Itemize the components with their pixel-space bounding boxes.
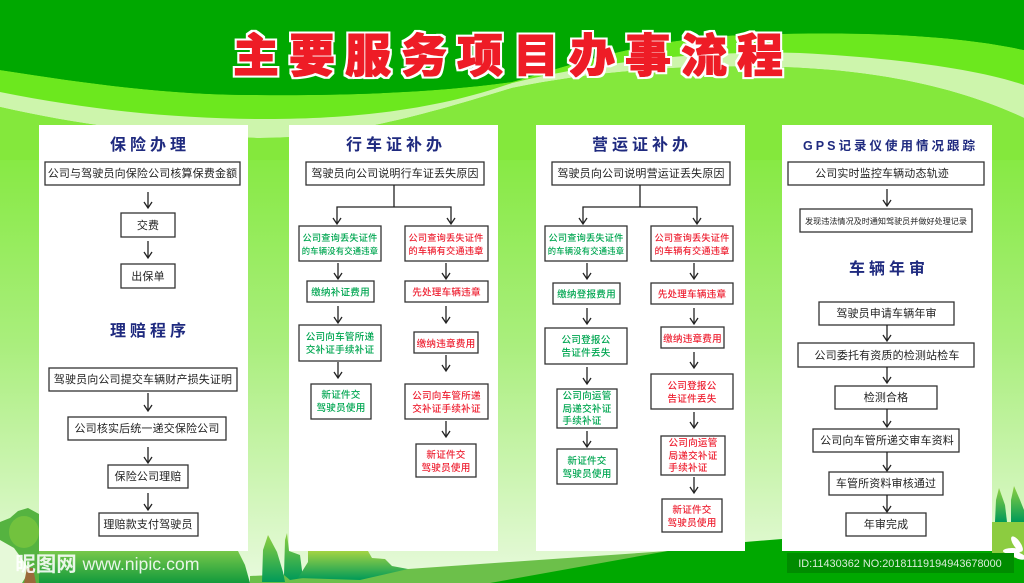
panel: insurance bbox=[39, 125, 248, 551]
watermark logo: www.nipic.com bbox=[82, 554, 199, 574]
red box 5 bbox=[661, 436, 725, 475]
green box 1: 的车辆没有交通违章 bbox=[302, 246, 378, 256]
red box 4: 公司登报公 bbox=[668, 380, 717, 392]
arrow bbox=[144, 241, 152, 258]
arrow bbox=[334, 306, 342, 323]
green box 3: 公司向车管所递 bbox=[306, 331, 374, 343]
box: 递交资料: 公司向车管所递交审车资料 bbox=[820, 433, 954, 447]
arrow bbox=[442, 263, 450, 279]
watermark logo bbox=[15, 553, 199, 576]
box: 理赔款支付: 理赔款支付驾驶员 bbox=[103, 517, 193, 531]
green box 4: 驾驶员使用 bbox=[317, 402, 365, 414]
red box 4: 交补证手续补证 bbox=[412, 403, 481, 415]
box: 交费 bbox=[121, 213, 175, 237]
arrow bbox=[334, 263, 342, 279]
heading: 车辆年审: 车辆年审 bbox=[849, 259, 929, 278]
box: 委托检车 bbox=[798, 343, 974, 367]
title: 主要服务项目办事流程 bbox=[233, 30, 793, 82]
heading: 营运证补办: 营运证补办 bbox=[592, 136, 692, 154]
panel: GPS and annual inspection bbox=[782, 125, 992, 551]
green box 2 bbox=[307, 281, 374, 302]
red box 1: 的车辆有交通违章 bbox=[654, 245, 730, 256]
green box 4: 新证件交 bbox=[321, 389, 361, 401]
arrow bbox=[690, 477, 698, 493]
watermark bar bbox=[787, 553, 1014, 573]
box: 统一递交: 公司核实后统一递交保险公司 bbox=[75, 421, 219, 435]
green box 2 bbox=[553, 283, 620, 304]
arrow bbox=[690, 352, 698, 368]
box: 说明原因 bbox=[552, 162, 730, 185]
red box 2 bbox=[651, 283, 733, 304]
box: 保险公司理赔: 保险公司理赔 bbox=[115, 469, 181, 483]
heading: 保险办理: 保险办理 bbox=[110, 135, 190, 154]
arrow bbox=[442, 355, 450, 371]
arrow bbox=[144, 493, 152, 510]
red box 2: 先处理车辆违章 bbox=[658, 288, 726, 300]
red box 1 bbox=[405, 226, 488, 261]
box: 检测合格: 检测合格 bbox=[864, 390, 908, 404]
arrow bbox=[690, 263, 698, 279]
green box 3: 公司登报公 bbox=[562, 334, 611, 346]
arrow bbox=[442, 306, 450, 323]
red box 6 bbox=[662, 499, 722, 532]
right decoration bbox=[992, 486, 1024, 561]
red box 2 bbox=[405, 281, 488, 302]
arrow bbox=[690, 412, 698, 428]
panel: operating licence replacement bbox=[536, 125, 745, 551]
arrow bbox=[883, 189, 891, 206]
box: 出保单 bbox=[121, 264, 175, 288]
panel: driving licence replacement bbox=[289, 125, 498, 551]
box: 提交证明: 驾驶员向公司提交车辆财产损失证明 bbox=[54, 372, 232, 386]
box: 统一递交 bbox=[68, 417, 226, 440]
arrow bbox=[883, 325, 891, 341]
red box 3 bbox=[661, 327, 724, 348]
box: 监控轨迹: 公司实时监控车辆动态轨迹 bbox=[815, 166, 949, 180]
green box 1 bbox=[299, 226, 381, 261]
red box 4 bbox=[651, 374, 733, 409]
watermark bar: ID:11430362 NO:20181119194943678000 bbox=[798, 558, 1002, 570]
arrow bbox=[144, 393, 152, 411]
arrow bbox=[883, 367, 891, 383]
box: 检测合格 bbox=[835, 386, 937, 409]
arrow bbox=[883, 495, 891, 512]
red box 5: 局递交补证 bbox=[669, 450, 718, 462]
red box 3 bbox=[414, 332, 478, 353]
red box 1: 的车辆有交通违章 bbox=[408, 245, 484, 256]
red box 3: 缴纳违章费用 bbox=[663, 333, 722, 345]
box: 递交资料 bbox=[813, 429, 959, 452]
box: 理赔款支付 bbox=[99, 513, 198, 536]
arrow bbox=[144, 192, 152, 208]
arrow bbox=[883, 409, 891, 427]
green box 4: 手续补证 bbox=[562, 415, 602, 427]
box: 审核通过: 车管所资料审核通过 bbox=[836, 476, 936, 490]
red box 5: 公司向运管 bbox=[669, 437, 718, 449]
box: 核算保费金额 bbox=[45, 162, 240, 185]
bottom green ground bbox=[250, 539, 1024, 583]
trees and hedge bbox=[262, 533, 408, 582]
green box 3: 告证件丢失 bbox=[562, 347, 611, 359]
heading: 行车证补办: 行车证补办 bbox=[346, 135, 446, 154]
arrow bbox=[583, 308, 591, 324]
box: 委托检车: 公司委托有资质的检测站检车 bbox=[815, 348, 959, 362]
red box 6: 新证件交 bbox=[672, 504, 712, 516]
green box 3 bbox=[545, 328, 627, 364]
box: 提交证明 bbox=[49, 368, 237, 391]
box: 申请年审 bbox=[819, 302, 954, 325]
red box 3: 缴纳违章费用 bbox=[417, 338, 475, 350]
arrow bbox=[883, 452, 891, 471]
red box 6: 驾驶员使用 bbox=[668, 517, 716, 529]
green box 3 bbox=[299, 325, 381, 361]
box: 审核通过 bbox=[829, 472, 943, 495]
green box 2: 缴纳登报费用 bbox=[557, 288, 616, 300]
green box 1: 的车辆没有交通违章 bbox=[548, 246, 624, 256]
red box 5 bbox=[416, 444, 476, 477]
box: 监控轨迹 bbox=[788, 162, 984, 185]
red box 1 bbox=[651, 226, 733, 261]
green box 1 bbox=[545, 226, 627, 261]
box: 保险公司理赔 bbox=[108, 465, 188, 488]
red box 5: 新证件交 bbox=[426, 449, 466, 461]
green box 5 bbox=[557, 449, 617, 484]
box: 发现违法: 发现违法情况及时通知驾驶员并做好处理记录 bbox=[805, 216, 967, 226]
box: 说明原因: 驾驶员向公司说明行车证丢失原因 bbox=[311, 166, 479, 180]
red box 5: 驾驶员使用 bbox=[422, 462, 470, 474]
arrow bbox=[442, 421, 450, 437]
box: 年审完成: 年审完成 bbox=[864, 517, 908, 531]
green box 4: 局递交补证 bbox=[563, 403, 612, 415]
red box 1: 公司查询丢失证件 bbox=[408, 232, 484, 243]
red box 2: 先处理车辆违章 bbox=[412, 286, 481, 298]
branching arrow bbox=[333, 185, 455, 224]
box: 交费: 交费 bbox=[137, 218, 159, 232]
green box 4 bbox=[557, 389, 617, 428]
box: 发现违法 bbox=[800, 209, 972, 232]
heading: 理赔程序: 理赔程序 bbox=[110, 321, 190, 340]
left bushes bbox=[0, 508, 250, 583]
box: 出保单: 出保单 bbox=[131, 269, 165, 283]
green box 1: 公司查询丢失证件 bbox=[302, 232, 378, 243]
green box 2: 缴纳补证费用 bbox=[311, 286, 370, 298]
arrow bbox=[690, 308, 698, 324]
red box 5: 手续补证 bbox=[668, 462, 708, 474]
arrow bbox=[583, 367, 591, 384]
heading: GPS记录仪使用情况跟踪: GPS记录仪使用情况跟踪 bbox=[803, 138, 978, 153]
arrow bbox=[583, 431, 591, 447]
red box 4: 公司向车管所递 bbox=[412, 390, 481, 402]
green box 4: 公司向运管 bbox=[563, 390, 612, 402]
box: 申请年审: 驾驶员申请车辆年审 bbox=[836, 306, 937, 320]
watermark logo: 昵图网 bbox=[15, 553, 77, 576]
green box 5: 驾驶员使用 bbox=[563, 468, 611, 480]
arrow bbox=[144, 447, 152, 463]
red box 4: 告证件丢失 bbox=[668, 393, 717, 405]
green box 1: 公司查询丢失证件 bbox=[548, 232, 624, 243]
red box 4 bbox=[405, 384, 488, 419]
box: 年审完成 bbox=[846, 513, 926, 536]
green box 5: 新证件交 bbox=[567, 455, 607, 467]
branching arrow bbox=[579, 185, 701, 224]
box: 说明原因 bbox=[306, 162, 484, 185]
box: 说明原因: 驾驶员向公司说明营运证丢失原因 bbox=[557, 166, 725, 180]
arrow bbox=[583, 263, 591, 279]
green box 4 bbox=[311, 384, 371, 419]
box: 核算保费金额: 公司与驾驶员向保险公司核算保费金额 bbox=[48, 166, 237, 180]
green box 3: 交补证手续补证 bbox=[306, 344, 374, 356]
red box 1: 公司查询丢失证件 bbox=[654, 232, 730, 243]
arrow bbox=[334, 362, 342, 378]
